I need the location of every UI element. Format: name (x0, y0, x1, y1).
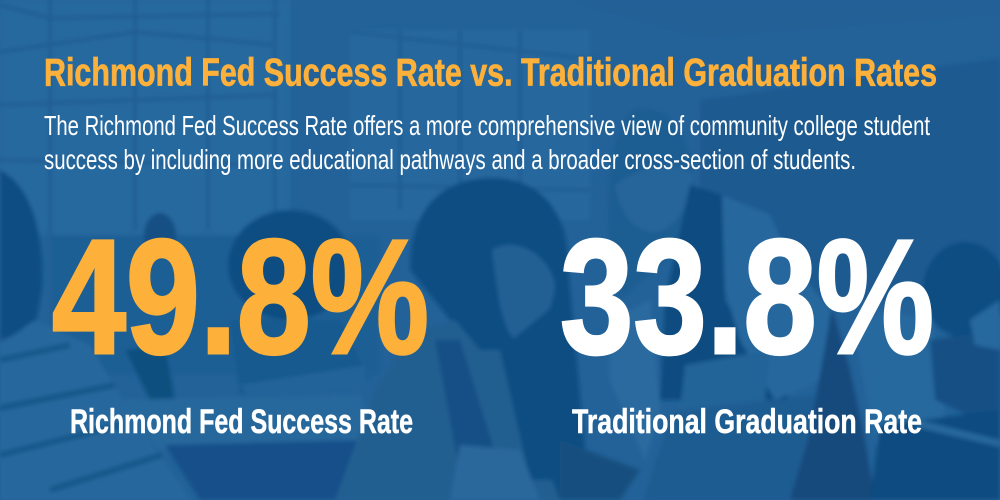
stat: Richmond Fed Success Rate (52, 205, 429, 441)
label: Richmond Fed Success Rate (70, 403, 413, 441)
intro text (44, 110, 930, 175)
left student in striped shirt (0, 170, 190, 500)
laptop and right student (643, 300, 1000, 500)
background students and tables (50, 210, 1000, 500)
windows and wall (0, 0, 1000, 300)
stat: Traditional Graduation Rate (560, 205, 934, 441)
value 49.8%: 49.8% (52, 205, 429, 388)
teacher (608, 108, 830, 460)
student with braids (335, 178, 640, 500)
